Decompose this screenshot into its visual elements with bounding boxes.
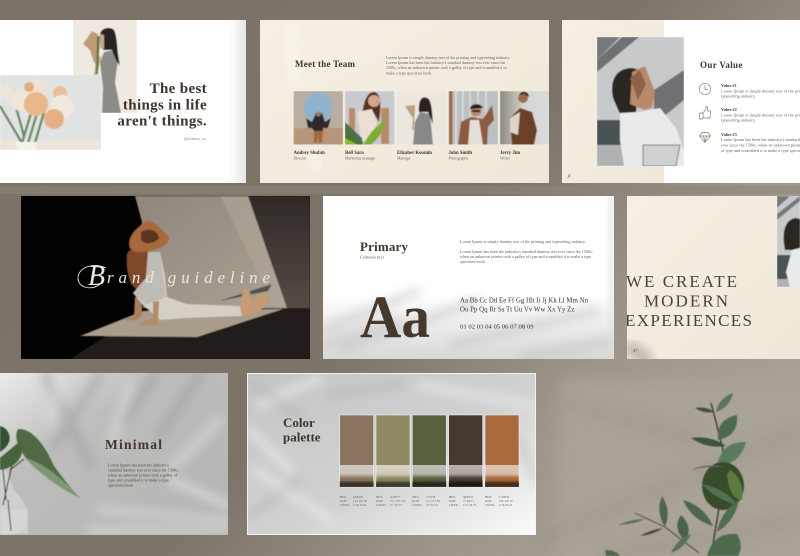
intro text: 1500s, when an unknown printer took a galley of type and scrambled it to — [386, 65, 507, 71]
team member: Bell Sara: Marketing manager — [345, 156, 376, 160]
specimen Aa: Aa — [360, 284, 430, 350]
colour codes 5 — [485, 495, 513, 507]
woman sitting — [123, 221, 268, 325]
value 2: typesetting industry. — [721, 118, 756, 122]
body text: when an unknown printer took a galley of — [108, 472, 178, 478]
value 1: typesetting industry. — [721, 94, 756, 98]
body text: type and scrambled it to make a type — [108, 478, 169, 482]
swatch 5 — [485, 415, 519, 487]
heading: Meet the Team — [295, 59, 355, 69]
colour codes 5: RGB: — [485, 499, 492, 503]
photo crop — [777, 196, 800, 287]
photo: woman in white shirt — [597, 37, 684, 166]
panel: minimal — [0, 373, 228, 535]
colour codes 1 — [340, 496, 367, 506]
alphabet specimen: Oo Pp Qq Rr Ss Tt Uu Vv Ww Xx Yy Zz — [460, 306, 574, 314]
swatch 4 — [449, 415, 483, 487]
quote heading: aren't things. — [117, 114, 207, 130]
colour codes 2: A39F77 — [390, 495, 401, 499]
colour codes 2: HEX: — [376, 495, 383, 499]
heading: Color — [283, 415, 315, 430]
heading: Primary — [360, 239, 408, 254]
colour codes 2 — [376, 496, 406, 506]
colour codes 1: 154 129 99 — [353, 499, 367, 503]
quote heading: The best — [150, 81, 207, 97]
alphabet specimen — [460, 298, 589, 330]
intro text: make a type specimen book. — [386, 70, 432, 76]
colour codes 5: CMYK: — [485, 503, 495, 507]
team member: Andrey Shubin — [294, 91, 343, 160]
body text: specimen book. — [108, 482, 134, 488]
colour codes 3: 3 0 32 54 — [426, 503, 438, 507]
colour codes 5: C47B43 — [499, 495, 510, 499]
colour codes 3: HEX: — [412, 495, 420, 499]
colour codes 4 — [448, 496, 476, 506]
team member: Elizaber Koomin — [397, 96, 434, 160]
team member: Elizaber Koomin: Elizaber Koomin — [397, 151, 432, 156]
headline: WE CREATE — [626, 272, 737, 291]
colour codes 4: HEX: — [449, 495, 456, 499]
value 2: Value #2 — [721, 107, 737, 112]
team member: John Smith: John Smith — [448, 151, 472, 156]
icon: diamond — [700, 132, 710, 142]
headline — [627, 276, 751, 326]
script title — [78, 265, 270, 288]
panel: meet the team — [260, 20, 549, 183]
description: when an unknown printer took a galley of type and scrambled it to make a type — [460, 254, 591, 259]
team member: Jerry Jim: Jerry Jim — [500, 151, 520, 156]
colour codes 5: 0 34 63 23 — [499, 503, 513, 507]
value 3: Value #3 — [721, 132, 737, 137]
decorative eucalyptus plant — [605, 393, 746, 556]
team member: Andrey Shubin: Andrey Shubin — [294, 151, 325, 156]
script title: rand guideline — [107, 268, 270, 287]
panel: quote slide — [0, 20, 246, 183]
team member: Bell Sara: Bell Sara — [345, 151, 364, 156]
team member: Jerry Jim — [500, 91, 549, 160]
colour codes 2: 0 7 30 33 — [390, 503, 402, 507]
headline: MODERN — [644, 292, 728, 310]
heading: Our Value — [700, 60, 743, 70]
page number: 47 — [633, 348, 638, 353]
value 2 — [721, 107, 800, 122]
colour codes 4: 77 64 51 — [463, 499, 474, 503]
colour codes 4: RGB: — [449, 499, 456, 503]
swatch 3 — [412, 415, 446, 487]
heading: palette — [283, 430, 321, 444]
photo: woman with dried flowers — [73, 20, 137, 113]
colour codes 3 — [412, 496, 440, 506]
colour codes 4: 4D4033 — [463, 495, 473, 499]
team member: Andrey Shubin: Director — [294, 156, 307, 160]
body text: standard dummy text ever since the 1500s, — [108, 468, 179, 474]
quote heading — [117, 81, 207, 130]
colour codes 2: RGB: — [376, 499, 383, 503]
colour codes 5: 196 123 67 — [499, 499, 513, 503]
heading — [283, 418, 320, 444]
intro text — [386, 55, 511, 76]
icon: thumbs up — [700, 106, 710, 119]
colour codes 3: CMYK: — [412, 503, 423, 507]
panel: primary typeface — [323, 196, 614, 359]
panel: our value — [562, 20, 800, 183]
page mark: ꭗ — [567, 174, 571, 179]
team member: Elizaber Koomin: Manager — [397, 156, 412, 160]
description — [460, 239, 593, 264]
alphabet specimen: Aa Bb Cc Dd Ee Ff Gg Hh Ii Jj Kk Ll Mm Nn — [460, 298, 589, 304]
wall light and shadow — [70, 196, 310, 359]
colour codes 3: 717158 — [426, 495, 436, 499]
vase with leaves — [0, 426, 80, 535]
swatch 2 — [376, 415, 410, 487]
colour codes 3: RGB: — [412, 499, 420, 503]
colour codes 1: CMYK: — [340, 503, 350, 507]
body text — [108, 462, 179, 488]
value 3 — [721, 132, 800, 153]
swatch 1 — [340, 415, 374, 487]
icon: clock — [699, 83, 711, 95]
team member: John Smith: Photography — [448, 156, 468, 160]
colour codes 4: 0 17 34 70 — [463, 503, 477, 507]
panel: brand guideline cover photo — [21, 196, 310, 359]
heading: Minimal — [105, 437, 162, 452]
team member: John Smith — [448, 91, 498, 160]
alphabet specimen: 01 02 03 04 05 06 07 08 09 — [460, 324, 534, 330]
script title: B — [88, 261, 105, 292]
description: Lorem Ipsum has been the industry's standard dummy text ever since the 1500s, — [460, 249, 593, 255]
photo: peach carnations in a white jug — [0, 75, 101, 151]
sub-heading: Crimson text — [360, 254, 385, 260]
intro text: Lorem Ipsum is simply dummy text of the printing and typesetting industry. — [386, 55, 511, 60]
description: specimen book. — [460, 259, 486, 264]
colour codes 1: HEX: — [340, 495, 347, 499]
quote heading: things in life — [123, 98, 207, 114]
value 1: Value #1 — [721, 83, 737, 88]
team member: Jerry Jim: Writer — [500, 156, 511, 160]
colour codes 3: 113 117 88 — [426, 499, 440, 503]
description: Lorem Ipsum is simply dummy text of the printing and typesetting industry. — [460, 239, 586, 244]
panel: color palette — [247, 373, 536, 535]
colour codes 1: 0 16 36 40 — [353, 503, 367, 507]
headline: EXPERIENCES — [625, 311, 752, 330]
team member: Bell Sara — [345, 91, 394, 160]
panel: we create modern experiences — [625, 196, 800, 362]
handle: @minna_so — [184, 136, 207, 141]
value 1 — [721, 83, 800, 98]
colour codes 2: 171 167 119 — [390, 499, 406, 503]
intro text: Lorem Ipsum has been the industry's standard dummy text ever since the — [386, 60, 505, 65]
body text: Lorem Ipsum has been the industry's — [108, 462, 169, 468]
colour codes 1: RGB: — [340, 499, 347, 503]
colour codes 2: CMYK: — [376, 503, 386, 507]
colour codes 1: 9A8163 — [353, 495, 363, 499]
colour codes 4: CMYK: — [449, 503, 459, 507]
colour codes 5: HEX: — [485, 495, 492, 499]
